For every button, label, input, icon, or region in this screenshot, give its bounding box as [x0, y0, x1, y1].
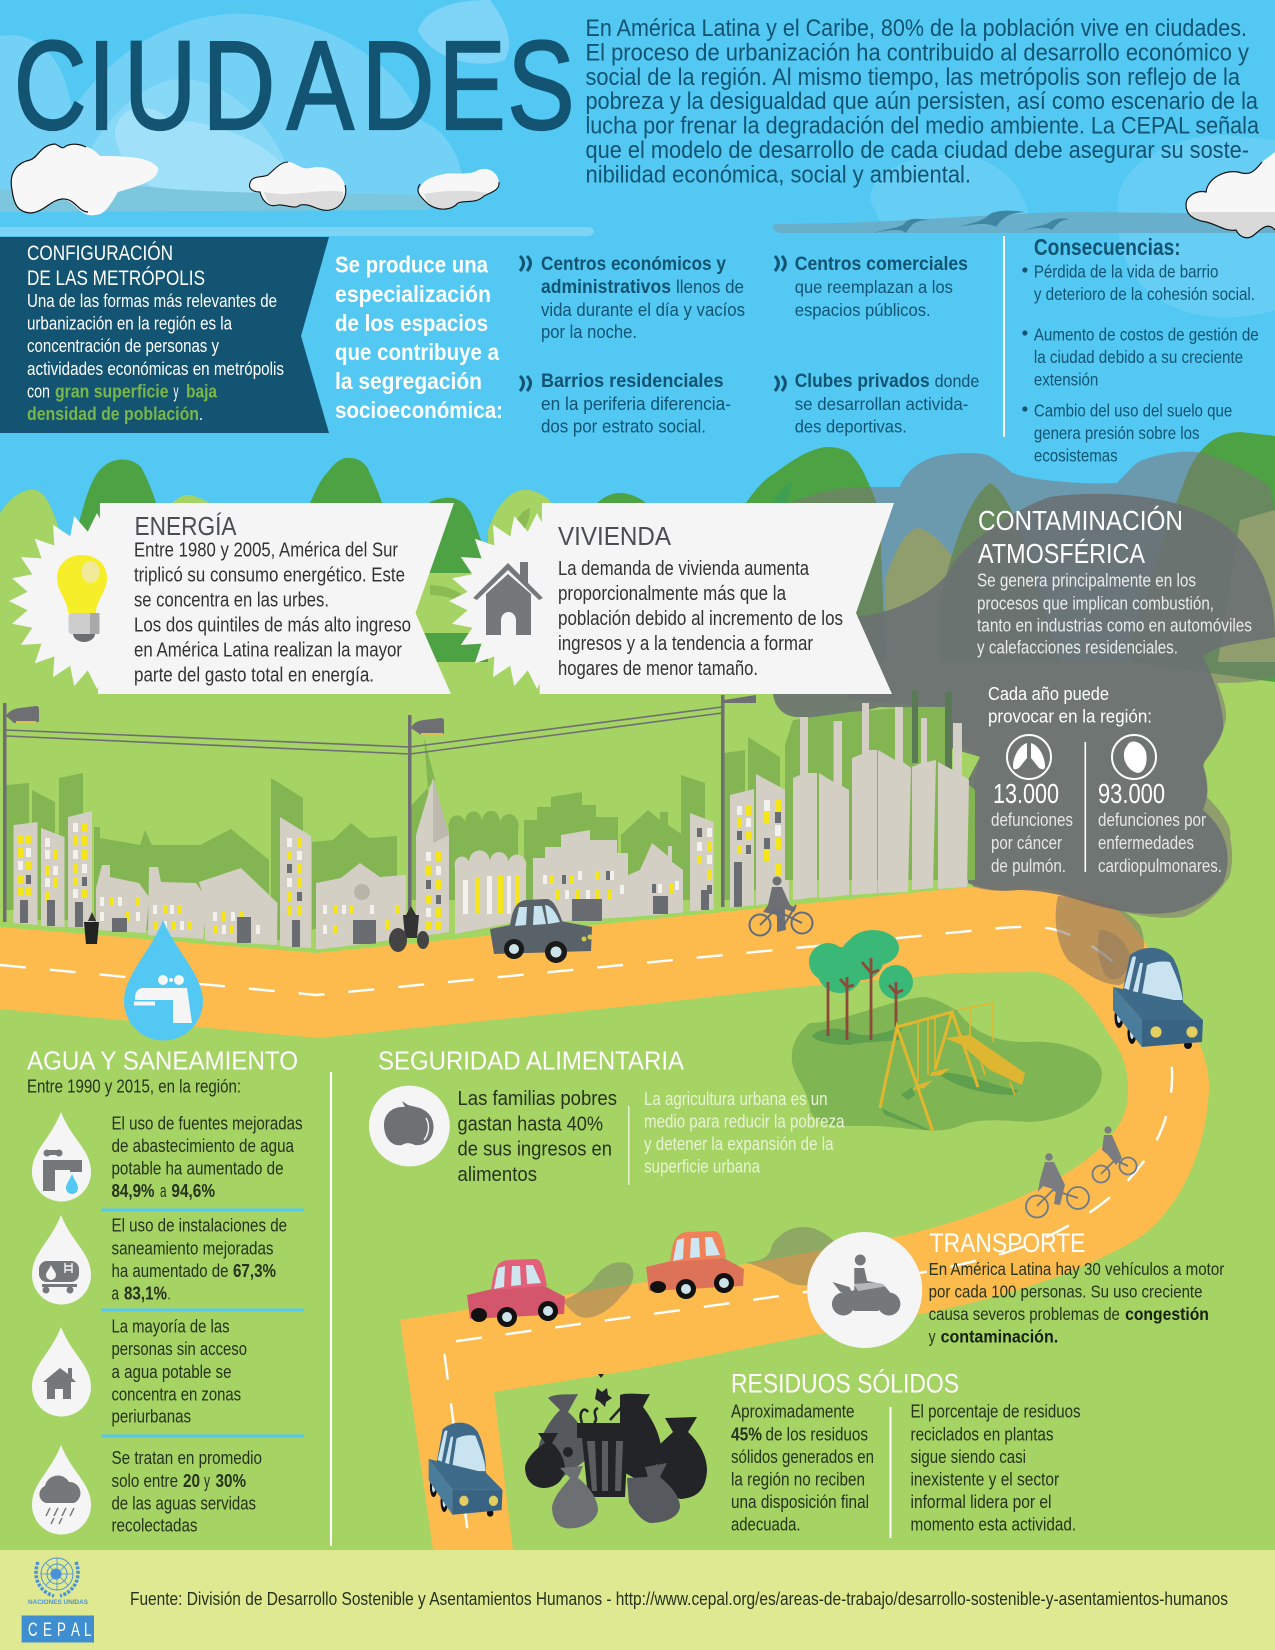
logo: CEPAL — [22, 1616, 94, 1642]
icon: water drop with tap — [124, 920, 203, 1040]
panel: contaminación atmosférica: provocar en la región: — [988, 707, 1152, 727]
text block: centros económicos: administrativos — [541, 276, 671, 298]
banner: energía: Entre 1980 y 2005, América del Sur — [134, 540, 398, 562]
banner: energía: se concentra en las urbes. — [134, 590, 329, 612]
icon: exhaust smoke orange car — [746, 1227, 838, 1285]
heading: especialización de los espacios: la segregación — [335, 368, 482, 394]
text block: clubes privados: Clubes privados — [795, 370, 930, 392]
icon: motorcycle — [807, 1232, 922, 1348]
cloud 2 — [249, 162, 346, 210]
item: aguas servidas: de las aguas servidas — [112, 1494, 256, 1514]
banner: vivienda: población debido al incremento de los — [558, 608, 843, 630]
panel: seguridad alimentaria: gastan hasta 40% — [458, 1112, 603, 1135]
intro text — [586, 15, 1259, 189]
heading: consecuencias — [1022, 234, 1259, 466]
item: aguas servidas: 20 — [183, 1471, 200, 1491]
heading: especialización de los espacios: que contribuye a — [335, 339, 499, 365]
text block: centros comerciales: espacios públicos. — [795, 300, 931, 320]
text block: barrios residenciales: Barrios residenciales — [541, 370, 724, 392]
panel: contaminación atmosférica: y calefacciones residenciales. — [977, 637, 1178, 657]
icon: trash cans — [84, 906, 429, 952]
item: fuentes de agua: potable ha aumentado de — [112, 1158, 284, 1178]
item: fuentes de agua: 94,6% — [171, 1181, 215, 1201]
banner: energía: en América Latina realizan la mayor — [134, 640, 402, 662]
panel: contaminación atmosférica: ATMOSFÉRICA — [978, 538, 1145, 569]
item: saneamiento: 67,3% — [233, 1261, 276, 1281]
panel: agua y saneamiento: Entre 1990 y 2015, en la región: — [27, 1076, 241, 1096]
panel: residuos sólidos: Aproximadamente — [731, 1402, 854, 1422]
panel: residuos sólidos: 45% — [731, 1424, 762, 1444]
panel: residuos sólidos: de los residuos — [766, 1424, 868, 1444]
heading: consecuencias: Consecuencias: — [1034, 234, 1181, 260]
panel: residuos sólidos: reciclados en plantas — [910, 1424, 1054, 1444]
heading: consecuencias: Pérdida de la vida de barrio — [1034, 262, 1218, 282]
banner: vivienda — [449, 503, 894, 694]
panel: residuos sólidos: momento esta actividad. — [910, 1514, 1076, 1534]
text block: barrios residenciales: en la periferia diferencia- — [541, 394, 731, 414]
item: aguas servidas: Se tratan en promedio — [112, 1448, 262, 1468]
panel: contaminación atmosférica: 93.000 — [1098, 778, 1165, 809]
panel: seguridad alimentaria — [369, 1046, 845, 1186]
text block: clubes privados: des deportivas. — [795, 417, 907, 437]
road — [0, 886, 1209, 1550]
panel: transporte: contaminación. — [941, 1326, 1058, 1346]
panel: contaminación atmosférica: de pulmón. — [991, 856, 1066, 876]
icon: grey car — [490, 899, 592, 963]
factories — [785, 690, 975, 900]
item: fuentes de agua — [32, 1112, 302, 1202]
item: saneamiento — [32, 1215, 287, 1304]
icon: orange car — [646, 1231, 744, 1299]
item: fuentes de agua: El uso de fuentes mejoradas — [112, 1114, 302, 1134]
panel: residuos sólidos: adecuada. — [731, 1514, 800, 1534]
panel: transporte: congestión — [1125, 1304, 1209, 1324]
item: fuentes de agua: 84,9% — [112, 1181, 154, 1201]
icon: red car — [467, 1259, 565, 1327]
panel: residuos sólidos: la región no reciben — [731, 1470, 865, 1490]
panel: configuración de las metrópolis: . — [199, 404, 203, 424]
icon: house — [473, 562, 543, 635]
text block: centros económicos: llenos de — [676, 277, 744, 297]
banner: energía — [9, 503, 454, 694]
heading: consecuencias: la ciudad debido a su creciente — [1034, 347, 1243, 367]
panel: contaminación atmosférica: 13.000 — [993, 778, 1059, 809]
panel: configuración de las metrópolis — [0, 237, 329, 433]
icon: united nations logo — [28, 1558, 88, 1606]
panel: residuos sólidos: sólidos generados en — [731, 1447, 874, 1467]
item: zonas periurbanas — [32, 1317, 247, 1427]
panel: residuos sólidos: una disposición final — [731, 1492, 869, 1512]
item: fuentes de agua: de abastecimiento de agua — [112, 1136, 295, 1156]
hills — [0, 432, 1275, 680]
item: saneamiento: a — [112, 1284, 120, 1304]
icon: light bulb — [57, 555, 107, 642]
smoke cloud — [773, 452, 1275, 985]
panel: residuos sólidos: inexistente y el sector — [910, 1470, 1059, 1490]
item: fuentes de agua: a — [160, 1181, 167, 1201]
item: aguas servidas: 30% — [216, 1471, 246, 1491]
panel: agua y saneamiento — [27, 1046, 332, 1546]
item: zonas periurbanas: personas sin acceso — [112, 1339, 247, 1359]
park with trees and playground — [792, 930, 1102, 1132]
heading: especialización de los espacios: especialización — [335, 281, 491, 307]
icon: blue car left — [429, 1423, 502, 1517]
banner: vivienda: La demanda de vivienda aumenta — [558, 558, 810, 580]
item: saneamiento: . — [168, 1284, 170, 1304]
text block: clubes privados: donde — [935, 371, 979, 391]
panel: configuración de las metrópolis: densidad de población — [27, 404, 199, 424]
text block: clubes privados: se desarrollan activida- — [795, 394, 968, 414]
panel: residuos sólidos: sigue siendo casi — [910, 1447, 1026, 1467]
panel: seguridad alimentaria: SEGURIDAD ALIMENTARIA — [378, 1046, 685, 1076]
text block: centros económicos: por la noche. — [541, 322, 637, 342]
panel: contaminación atmosférica: Se genera principalmente en los — [977, 571, 1196, 591]
item: saneamiento: saneamiento mejoradas — [112, 1238, 274, 1258]
footer — [0, 1550, 1275, 1650]
panel: seguridad alimentaria: La agricultura urbana es un — [644, 1089, 828, 1109]
icon: cyclist on road — [750, 876, 812, 936]
panel: contaminación atmosférica: CONTAMINACIÓN — [978, 505, 1183, 536]
title: CIUDADES — [14, 16, 575, 157]
icon: heart — [1112, 735, 1156, 779]
intro text: nibilidad económica, social y ambiental. — [586, 162, 971, 189]
panel: configuración de las metrópolis: y — [174, 382, 178, 402]
banner: energía: Los dos quintiles de más alto ingreso — [134, 615, 411, 637]
panel: configuración de las metrópolis: concentración de personas y — [27, 336, 219, 356]
panel: configuración de las metrópolis: CONFIGURACIÓN — [27, 242, 173, 265]
heading: consecuencias: genera presión sobre los — [1034, 423, 1200, 443]
icon: blue car right — [1113, 948, 1203, 1049]
item: aguas servidas: solo entre — [112, 1471, 178, 1491]
banner: energía: parte del gasto total en energía. — [134, 665, 374, 687]
item: zonas periurbanas: a agua potable se — [112, 1362, 232, 1382]
icon: garbage pile — [525, 1374, 707, 1528]
icon: tomato — [369, 1086, 450, 1166]
panel: seguridad alimentaria: y detener la expansión de la — [644, 1134, 834, 1154]
item: zonas periurbanas: La mayoría de las — [112, 1317, 230, 1337]
building windows — [18, 800, 781, 947]
panel: configuración de las metrópolis: actividades económicas en metrópolis — [27, 359, 284, 379]
heading: consecuencias: extensión — [1034, 370, 1098, 390]
item: saneamiento: ha aumentado de — [112, 1261, 228, 1281]
panel: contaminación atmosférica: por cáncer — [991, 833, 1062, 853]
panel: contaminación atmosférica: defunciones por — [1098, 810, 1206, 830]
birds — [873, 211, 1070, 233]
sky background — [0, 0, 1275, 700]
panel: contaminación atmosférica: procesos que implican combustión, — [977, 593, 1214, 613]
heading: consecuencias: ecosistemas — [1034, 446, 1118, 466]
logo: CEPAL: CEPAL — [28, 1620, 91, 1641]
panel: contaminación atmosférica: cardiopulmonares. — [1098, 856, 1222, 876]
text block: centros económicos: vida durante el día y vacíos — [541, 300, 745, 320]
background skyline — [6, 737, 780, 940]
text block: barrios residenciales — [520, 370, 731, 437]
panel: seguridad alimentaria: alimentos — [458, 1163, 537, 1186]
text block: centros comerciales: que reemplazan a los — [795, 277, 953, 297]
panel: transporte: por cada 100 personas. Su uso creciente — [929, 1281, 1202, 1302]
panel: seguridad alimentaria: Las familias pobres — [458, 1087, 617, 1110]
text block: centros económicos: Centros económicos y — [541, 253, 726, 275]
panel: contaminación atmosférica — [977, 505, 1252, 876]
street lamps — [3, 695, 756, 923]
panel: residuos sólidos: informal lidera por el — [910, 1492, 1052, 1512]
city buildings — [14, 774, 789, 950]
item: zonas periurbanas: periurbanas — [112, 1407, 191, 1427]
icon: united nations logo: NACIONES UNIDAS — [28, 1600, 88, 1606]
icon: exhaust smoke red car — [563, 1262, 633, 1318]
panel: contaminación atmosférica: Cada año puede — [988, 684, 1109, 704]
panel: transporte: y — [929, 1326, 936, 1346]
panel: configuración de las metrópolis: con — [27, 382, 50, 402]
panel: configuración de las metrópolis: urbanización en la región es la — [27, 314, 233, 334]
banner: energía: triplicó su consumo energético. Este — [134, 565, 405, 587]
panel: configuración de las metrópolis: gran superficie — [55, 382, 168, 402]
icon: lungs — [1007, 735, 1051, 779]
item: zonas periurbanas: concentra en zonas — [112, 1384, 241, 1404]
panel: transporte: TRANSPORTE — [930, 1228, 1085, 1258]
item: saneamiento: El uso de instalaciones de — [112, 1216, 287, 1236]
panel: configuración de las metrópolis: baja — [186, 382, 218, 402]
panel: residuos sólidos: El porcentaje de residuos — [910, 1402, 1080, 1422]
panel: seguridad alimentaria: de sus ingresos en — [458, 1138, 612, 1161]
banner: energía: ENERGÍA — [134, 511, 237, 541]
panel: transporte: causa severos problemas de — [929, 1304, 1120, 1324]
item: saneamiento: 83,1% — [124, 1284, 167, 1304]
heading: consecuencias: Cambio del uso del suelo que — [1034, 401, 1232, 421]
banner: vivienda: VIVIENDA — [558, 521, 672, 551]
panel: transporte — [807, 1228, 1224, 1348]
panel: contaminación atmosférica: defunciones — [991, 810, 1073, 830]
panel: seguridad alimentaria: superficie urbana — [644, 1156, 761, 1176]
panel: residuos sólidos — [731, 1367, 1080, 1538]
cloud 1 — [11, 144, 158, 215]
background clouds — [0, 0, 1275, 317]
ground — [0, 662, 1275, 1552]
panel: configuración de las metrópolis: DE LAS METRÓPOLIS — [27, 267, 205, 290]
banner: vivienda: ingresos y a la tendencia a formar — [558, 633, 813, 655]
panel: contaminación atmosférica: enfermedades — [1098, 833, 1194, 853]
item: aguas servidas: y — [204, 1471, 210, 1491]
text block: centros comerciales — [775, 253, 968, 320]
text block: barrios residenciales: dos por estrato social. — [541, 417, 706, 437]
item: aguas servidas: recolectadas — [112, 1516, 198, 1536]
panel: seguridad alimentaria: medio para reducir la pobreza — [644, 1111, 845, 1131]
text block: centros económicos — [520, 253, 745, 342]
cloud 4 — [1186, 152, 1275, 238]
icon: cyclists — [1026, 1126, 1136, 1218]
text block: centros comerciales: Centros comerciales — [795, 253, 968, 275]
heading: especialización de los espacios: Se produce una — [335, 252, 488, 278]
heading: especialización de los espacios: socioeconómica: — [335, 397, 503, 423]
heading: especialización de los espacios: de los espacios — [335, 310, 488, 336]
panel: transporte: En América Latina hay 30 vehículos a motor — [929, 1259, 1224, 1279]
text block: clubes privados — [775, 370, 979, 437]
panel: agua y saneamiento: AGUA Y SANEAMIENTO — [27, 1046, 298, 1076]
banner: vivienda: proporcionalmente más que la — [558, 583, 787, 605]
heading: especialización de los espacios — [335, 252, 503, 423]
cloud 3 — [418, 169, 499, 209]
panel: configuración de las metrópolis: Una de las formas más relevantes de — [27, 291, 277, 311]
panel: residuos sólidos: RESIDUOS SÓLIDOS — [731, 1367, 959, 1398]
item: aguas servidas — [32, 1445, 262, 1536]
banner: vivienda: hogares de menor tamaño. — [558, 658, 758, 680]
power lines — [6, 707, 722, 754]
